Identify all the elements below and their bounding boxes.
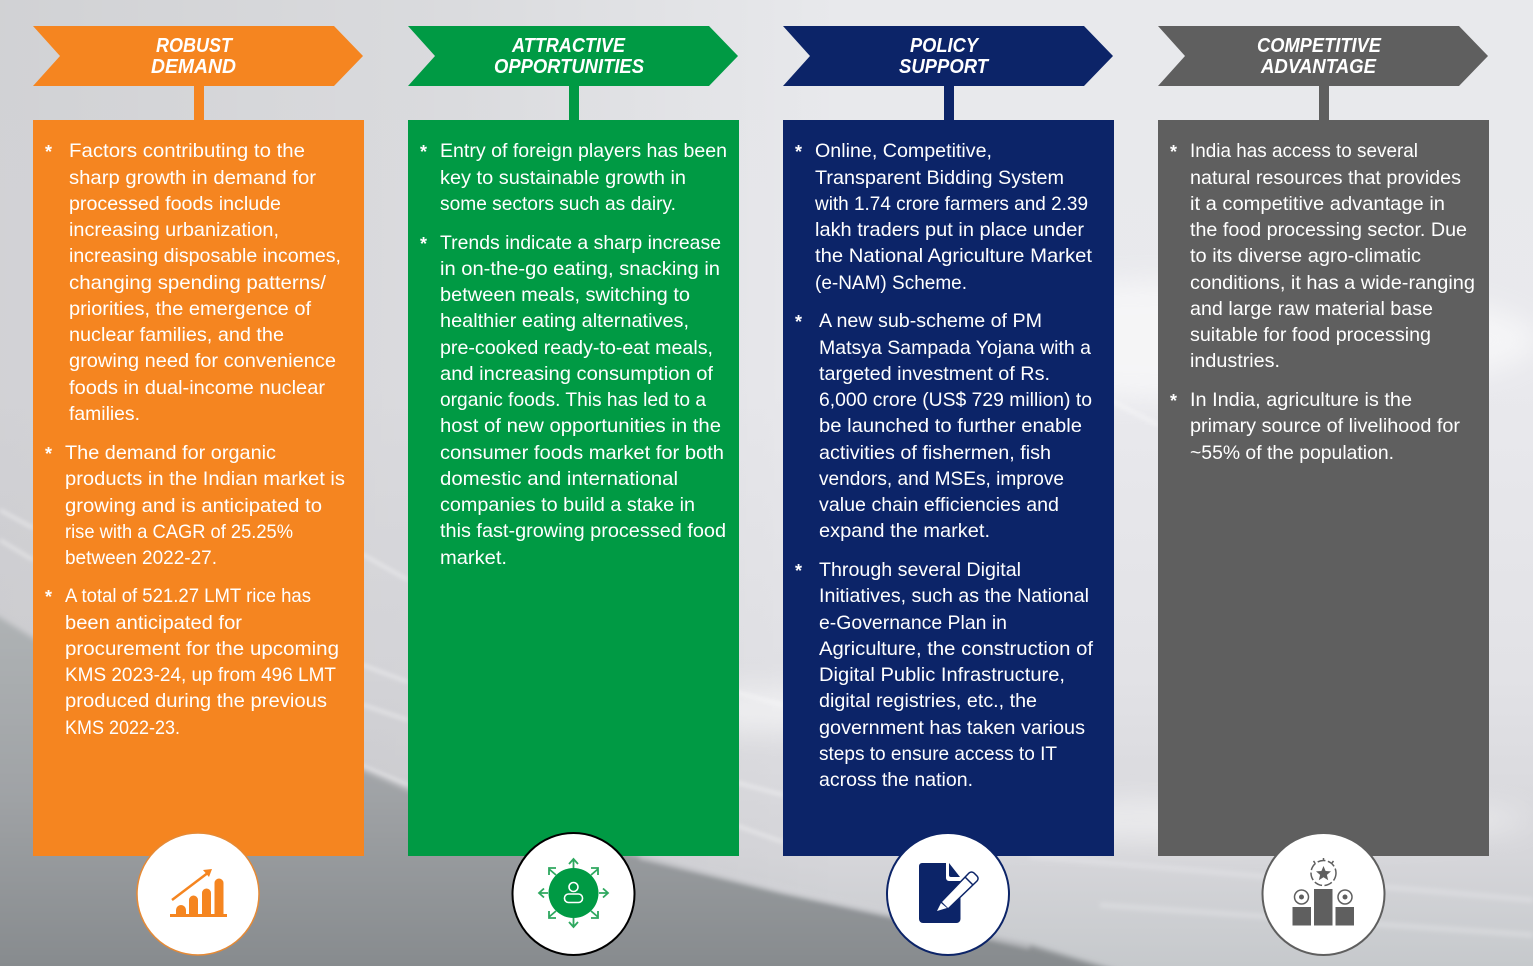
panel: robust demand text: between 2022-27. [65, 547, 217, 569]
column: robust demand [33, 26, 364, 955]
icon: podium with star [1262, 833, 1384, 955]
panel: robust demand text: * [45, 587, 52, 607]
panel: competitive advantage text: In India, agriculture is the [1190, 389, 1412, 411]
panel: policy support text: * [795, 312, 802, 332]
panel: competitive advantage text: to its diverse agro-climatic [1190, 245, 1421, 267]
panel: robust demand text: produced during the previous [65, 690, 327, 712]
panel: policy support text: be launched to further enable [819, 415, 1082, 437]
column: policy support [783, 26, 1114, 955]
panel: robust demand text: families. [69, 403, 140, 425]
panel: policy support text: * [795, 142, 802, 162]
panel: robust demand text: * [45, 444, 52, 464]
panel: robust demand text: procurement for the upcoming [65, 638, 339, 660]
panel: robust demand text: The demand for organic [65, 442, 276, 464]
icon: document and pencil [887, 833, 1009, 955]
banner: competitive advantage [1158, 26, 1488, 120]
panel: robust demand text: growing and is anticipated to [65, 495, 322, 517]
panel: robust demand text: sharp growth in demand for [69, 167, 317, 189]
banner: policy support [783, 26, 1113, 120]
panel: competitive advantage text: the food processing sector. Due [1190, 219, 1467, 241]
panel: robust demand text: growing need for convenience [69, 350, 336, 372]
banner: competitive advantage: ADVANTAGE [1260, 56, 1377, 78]
panel: competitive advantage text: ~55% of the population. [1190, 442, 1394, 464]
panel: robust demand text: been anticipated for [65, 612, 243, 634]
panel: attractive opportunities text: some sectors such as dairy. [440, 193, 676, 215]
panel: robust demand text: priorities, the emergence of [69, 298, 312, 320]
banner: attractive opportunities: ATTRACTIVE [511, 35, 626, 57]
panel: competitive advantage text: * [1170, 391, 1177, 411]
panel: policy support text: Digital Public Infrastructure, [819, 664, 1065, 686]
panel: policy support text: Initiatives, such as the National [819, 585, 1089, 607]
panel: attractive opportunities text: Entry of foreign players has been [440, 140, 727, 162]
panel: robust demand text: products in the Indian market is [65, 468, 345, 490]
banner: attractive opportunities: OPPORTUNITIES [494, 56, 645, 78]
panel: robust demand text: * [45, 142, 52, 162]
panel: policy support text: A new sub-scheme of PM [819, 310, 1042, 332]
panel: policy support text: lakh traders put in place under [815, 219, 1085, 241]
panel: policy support text: government has taken various [819, 717, 1085, 739]
panel: robust demand text: processed foods include [69, 193, 281, 215]
panel: competitive advantage text: * [1170, 142, 1177, 162]
panel: competitive advantage text: suitable for food processing [1190, 324, 1431, 346]
panel: policy support text: Agriculture, the construction of [819, 638, 1094, 660]
panel: competitive advantage text: natural resources that provides [1190, 167, 1461, 189]
panel: robust demand text: increasing urbanization, [69, 219, 279, 241]
panel: attractive opportunities text: organic foods. This has led to a [440, 389, 706, 411]
panel: policy support text: e-Governance Plan in [819, 612, 1007, 634]
panel: competitive advantage text [1158, 120, 1489, 856]
panel: attractive opportunities text: key to sustainable growth in [440, 167, 686, 189]
panel: attractive opportunities text: market. [440, 547, 507, 569]
banner: attractive opportunities [408, 26, 738, 120]
panel: policy support text: Matsya Sampada Yojana with a [819, 337, 1091, 359]
banner: robust demand [33, 26, 363, 120]
panel: competitive advantage text: conditions, it has a wide-ranging [1190, 272, 1475, 294]
panel: robust demand text: A total of 521.27 LMT rice has [65, 585, 311, 607]
panel: policy support text: Transparent Bidding System [815, 167, 1064, 189]
panel: policy support text: Online, Competitive, [815, 140, 992, 162]
panel: policy support text: (e-NAM) Scheme. [815, 272, 967, 294]
panel: attractive opportunities text: host of new opportunities in the [440, 415, 721, 437]
column: attractive opportunities [408, 26, 739, 955]
panel: competitive advantage text: industries. [1190, 350, 1280, 372]
panel: competitive advantage text: India has access to several [1190, 140, 1418, 162]
panel: attractive opportunities text [408, 120, 739, 856]
panel: robust demand text: nuclear families, and the [69, 324, 284, 346]
panel: policy support text: digital registries, etc., the [819, 690, 1037, 712]
panel: policy support text: Through several Digital [819, 559, 1021, 581]
panel: policy support text: activities of fishermen, fish [819, 442, 1051, 464]
panel: attractive opportunities text: consumer foods market for both [440, 442, 724, 464]
panel: policy support text: with 1.74 crore farmers and 2.39 [814, 193, 1088, 215]
banner: policy support: SUPPORT [899, 56, 990, 78]
panel: policy support text: * [795, 561, 802, 581]
panel: attractive opportunities text: * [420, 234, 427, 254]
panel: policy support text: expand the market. [819, 520, 990, 542]
panel: robust demand text: rise with a CAGR of 25.25% [65, 521, 293, 543]
panel: competitive advantage text: and large raw material base [1190, 298, 1433, 320]
panel: robust demand text [33, 120, 364, 856]
panel: robust demand text: changing spending patterns/ [69, 272, 327, 294]
panel: attractive opportunities text: and increasing consumption of [440, 363, 714, 385]
panel: attractive opportunities text: * [420, 142, 427, 162]
column: competitive advantage [1158, 26, 1489, 955]
banner: robust demand: DEMAND [151, 56, 236, 78]
panel: policy support text: value chain efficiencies and [819, 494, 1059, 516]
panel: policy support text [783, 120, 1114, 856]
panel: competitive advantage text: it a competitive advantage in [1190, 193, 1445, 215]
panel: robust demand text: KMS 2023-24, up from 496 LMT [65, 664, 336, 686]
panel: attractive opportunities text: between meals, switching to [440, 284, 690, 306]
panel: attractive opportunities text: domestic and international [440, 468, 678, 490]
panel: robust demand text: Factors contributing to the [69, 140, 305, 162]
panel: policy support text: targeted investment of Rs. [819, 363, 1050, 385]
panel: policy support text: steps to ensure access to IT [819, 743, 1057, 765]
panel: attractive opportunities text: healthier eating alternatives, [440, 310, 689, 332]
panel: robust demand text: foods in dual-income nuclear [69, 377, 326, 399]
panel: competitive advantage text: primary source of livelihood for [1190, 415, 1461, 437]
panel: robust demand text: increasing disposable incomes, [69, 245, 341, 267]
panel: robust demand text: KMS 2022-23. [65, 717, 180, 739]
panel: policy support text: vendors, and MSEs, improve [819, 468, 1064, 490]
panel: attractive opportunities text: in on-the-go eating, snacking in [440, 258, 720, 280]
panel: attractive opportunities text: Trends indicate a sharp increase [440, 232, 721, 254]
panel: policy support text: the National Agriculture Market [815, 245, 1093, 267]
banner: robust demand: ROBUST [156, 35, 234, 57]
banner: policy support: POLICY [910, 35, 980, 57]
panel: attractive opportunities text: this fast-growing processed food [440, 520, 726, 542]
banner: competitive advantage: COMPETITIVE [1257, 35, 1382, 57]
panel: policy support text: across the nation. [819, 769, 973, 791]
panel: policy support text: 6,000 crore (US$ 729 million) to [819, 389, 1092, 411]
icon: person with outward arrows [512, 833, 634, 955]
icon: rising bar chart [137, 833, 259, 955]
panel: attractive opportunities text: companies to build a stake in [440, 494, 695, 516]
panel: attractive opportunities text: pre-cooked ready-to-eat meals, [440, 337, 713, 359]
